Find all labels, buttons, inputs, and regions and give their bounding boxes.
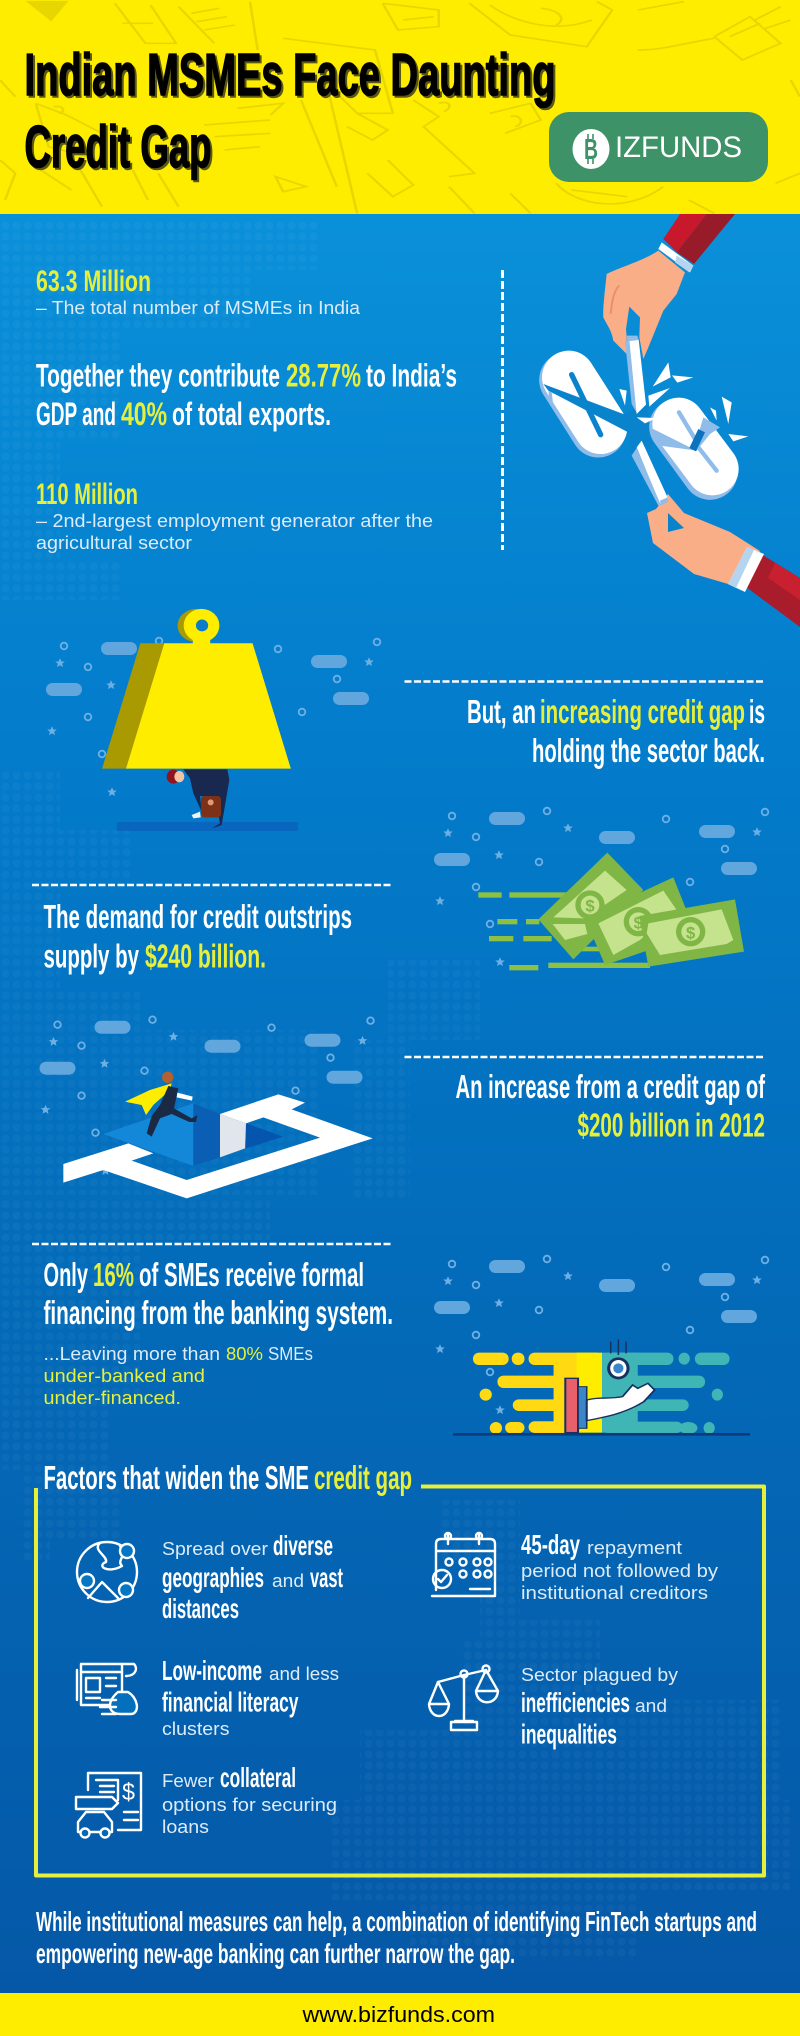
bill front	[639, 899, 744, 967]
top sleeve and hand	[663, 214, 707, 252]
factor: low income: Low-income	[162, 1655, 262, 1686]
text: increasing credit gap: is	[749, 693, 765, 730]
bill back	[538, 853, 643, 959]
weight ring	[102, 609, 291, 769]
factor: inefficiencies: and	[635, 1695, 667, 1716]
pillar	[220, 1114, 246, 1157]
stat: 110 Million: 110 Million	[36, 478, 138, 511]
bill middle	[585, 877, 688, 965]
sky decoration: banking scene	[434, 1256, 768, 1414]
factor: geographies: and	[272, 1570, 304, 1591]
doodle pattern	[0, 2, 800, 213]
teal streaks	[602, 1353, 730, 1434]
icon: loan document and car: $	[122, 1779, 135, 1806]
closing statement: empowering new-age banking can further narrow the gap.	[36, 1938, 515, 1969]
text: under-banked: SMEs	[268, 1343, 313, 1364]
stat: 63.3 Million: – The total number of MSMEs in India	[36, 297, 361, 318]
stat: GDP and exports	[36, 358, 457, 432]
logo: BizFunds: B	[584, 134, 598, 166]
factor: low income	[77, 1655, 339, 1739]
text: formal financing: 16%	[93, 1256, 134, 1293]
title: Credit Gap	[24, 114, 212, 180]
icon: loan document and car	[76, 1773, 141, 1838]
stat: GDP and exports: 40%	[121, 396, 167, 432]
factor: geographies: vast	[310, 1562, 343, 1593]
factor: inefficiencies: inefficiencies	[521, 1687, 630, 1718]
bank pillar	[565, 1378, 578, 1433]
falling coin	[607, 1357, 630, 1379]
text: increasing credit gap: But, an	[467, 693, 536, 730]
yellow header band	[0, 0, 800, 214]
factor: geographies: distances	[162, 1593, 239, 1624]
stat: 63.3 Million: 63.3 Million	[36, 265, 151, 298]
illustration: hands breaking chain	[543, 214, 800, 627]
icon: calendar	[432, 1533, 495, 1596]
open hand	[587, 1383, 655, 1421]
factor: collateral: collateral	[220, 1762, 296, 1793]
bill back: $	[585, 897, 595, 916]
shards	[619, 362, 748, 441]
logo: BizFunds: IZFUNDS	[615, 131, 742, 164]
illustration: flying money	[478, 853, 744, 970]
factors frame	[36, 1486, 764, 1876]
white path	[63, 1094, 373, 1198]
text: under-banked: under-financed.	[44, 1387, 181, 1408]
factor: 45-day repayment	[432, 1529, 719, 1603]
illustration: man under heavy weight	[102, 609, 298, 831]
text: formal financing: Only	[44, 1256, 88, 1293]
left broken link	[567, 375, 601, 435]
factor: inefficiencies: inequalities	[521, 1718, 617, 1750]
text: increase from 2012	[456, 1068, 766, 1144]
footer band: www.bizfunds.com	[301, 2002, 495, 2027]
factor: 45-day repayment: period not followed by	[521, 1560, 719, 1581]
bill middle: $	[634, 913, 644, 932]
heading: factors: Factors that widen the SME	[44, 1459, 309, 1496]
factor: low income: clusters	[162, 1718, 230, 1739]
sky decoration: jumping scene	[40, 1016, 374, 1175]
text: demand outstrips supply	[44, 898, 352, 974]
ground shadow	[117, 822, 298, 831]
text: under-banked: ...Leaving more than	[44, 1343, 220, 1364]
illustration: man leaping over gap	[63, 1072, 373, 1198]
man	[167, 769, 229, 828]
text: formal financing	[44, 1256, 393, 1331]
icon: globe with people	[77, 1542, 137, 1602]
stat: 110 Million: – 2nd-largest employment generator after the	[36, 510, 433, 531]
factor: collateral: Fewer	[162, 1770, 214, 1791]
snapped middle pieces	[625, 340, 637, 414]
yellow streaks	[473, 1353, 602, 1434]
speed lines	[478, 892, 650, 970]
bill front: $	[686, 923, 696, 942]
bottom sleeve and hand	[647, 494, 800, 627]
factor: collateral: loans	[162, 1816, 209, 1837]
stat: GDP and exports: to India’s	[366, 358, 457, 394]
divider	[32, 884, 391, 886]
factor: inefficiencies	[429, 1664, 679, 1750]
stat: 63.3 Million	[36, 265, 361, 318]
heading: factors: credit gap	[314, 1459, 412, 1496]
divider	[404, 1056, 764, 1058]
stat: GDP and exports: Together they contribute	[36, 358, 280, 394]
stat: 110 Million: agricultural sector	[36, 532, 192, 553]
factor: geographies: Spread over	[162, 1538, 268, 1559]
right broken link	[677, 412, 717, 472]
title	[24, 42, 556, 180]
divider	[32, 1243, 391, 1245]
stat: GDP and exports: 28.77%	[286, 358, 361, 394]
factor: low income: and less	[269, 1663, 339, 1684]
closing statement	[36, 1906, 757, 1969]
stat: GDP and exports: GDP and	[36, 396, 116, 432]
footer band	[0, 1993, 800, 2036]
factor: geographies: diverse	[273, 1530, 333, 1561]
factor: inefficiencies: Sector plagued by	[521, 1664, 679, 1685]
stat: GDP and exports: of total exports.	[172, 396, 331, 432]
text: demand outstrips supply: $240 billion.	[145, 938, 266, 974]
icon: balance scales	[429, 1666, 498, 1730]
factor: collateral: options for securing	[162, 1794, 337, 1815]
icon: newspaper and money	[77, 1664, 137, 1714]
factor: 45-day repayment: 45-day	[521, 1529, 580, 1560]
text: demand outstrips supply: supply by	[44, 938, 139, 974]
illustration: hand catching coin	[453, 1339, 750, 1436]
text: under-banked	[44, 1343, 313, 1408]
factor: 45-day repayment: institutional creditors	[521, 1582, 708, 1603]
factor: geographies: geographies	[162, 1562, 264, 1593]
text: under-banked: under-banked and	[44, 1365, 205, 1386]
text: formal financing: of SMEs receive formal	[139, 1256, 364, 1293]
factor: geographies	[77, 1530, 343, 1624]
text: under-banked: 80%	[226, 1343, 263, 1364]
text: formal financing: financing from the banking system.	[44, 1294, 393, 1331]
weight body	[102, 643, 166, 769]
factor: 45-day repayment: repayment	[587, 1537, 682, 1558]
light plate and pit	[103, 1103, 193, 1166]
factor: collateral	[76, 1762, 337, 1838]
running man	[125, 1072, 197, 1137]
sky decoration: weight scene	[46, 638, 380, 796]
ground line	[453, 1433, 750, 1436]
stat: 110 Million	[36, 478, 433, 553]
factor: low income: financial literacy	[162, 1686, 299, 1718]
text: demand outstrips supply: The demand for credit outstrips	[44, 898, 352, 935]
logo: BizFunds	[549, 112, 768, 182]
sky decoration: money scene	[434, 808, 768, 966]
divider	[404, 680, 764, 683]
text: increasing credit gap	[467, 693, 765, 769]
